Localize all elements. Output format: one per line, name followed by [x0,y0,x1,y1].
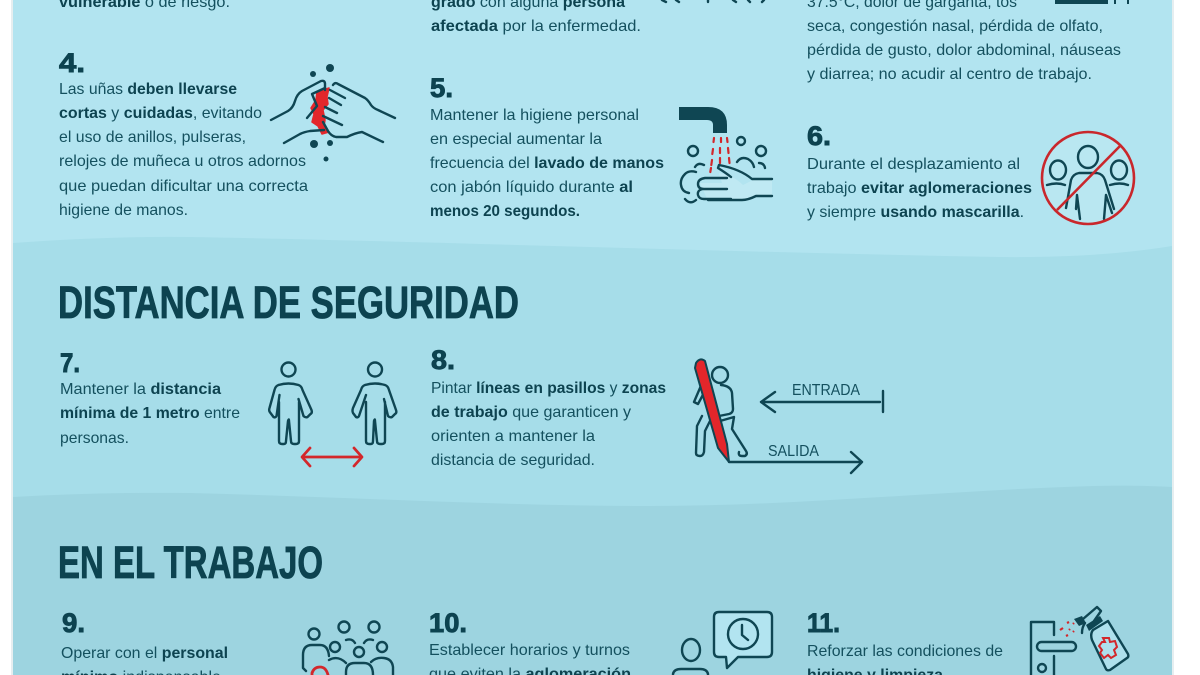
icon: bed [1055,0,1129,4]
measure 8: painted lines: de trabajo que garanticen y [431,404,631,421]
measure 4: nails: cortas y cuidadas, evitando [59,105,262,122]
measure 7: distance: personas. [60,430,129,447]
measure 5: handwashing: en especial aumentar la [430,131,602,148]
panel: higiene [13,0,1172,262]
measure 8: painted lines: distancia de seguridad. [431,452,595,469]
measure 5: handwashing: frecuencia del lavado de manos [430,155,664,172]
icon: faucet and washing hand [679,107,772,202]
icon: disinfectant spray on door handle [1031,607,1128,675]
measure 6: commute: trabajo evitar aglomeraciones [807,180,1032,197]
measure contact text line 2: afectada por la enfermedad. [431,18,641,35]
measure 4: nails: higiene de manos. [59,202,188,219]
measure 4: nails: 4. [59,48,85,78]
measure 9: minimum staff [61,608,228,675]
measure 7: distance: 7. [60,348,80,378]
measure 4: nails: que puedan dificultar una correcta [59,178,308,195]
heading: distancia de seguridad: DISTANCIA DE SEGURIDAD [58,277,519,328]
measure 8: painted lines: Pintar líneas en pasillos y zonas [431,380,666,397]
measure 8: painted lines: 8. [431,345,455,375]
heading: en el trabajo: EN EL TRABAJO [58,537,323,588]
label: entrada: ENTRADA [792,382,860,399]
panel: en el trabajo [13,486,1172,675]
icon: person with clock speech bubble [673,612,772,675]
measure 7: distance: Mantener la distancia [60,381,221,398]
measure 5: handwashing: con jabón líquido durante al [430,179,633,196]
measure 8: painted lines [431,345,666,469]
panel: distancia de seguridad [13,237,1172,515]
measure 4: nails: relojes de muñeca u otros adornos [59,153,306,170]
label: salida: SALIDA [768,443,819,460]
icon: no crowds [1042,132,1134,224]
measure 5: handwashing: 5. [430,73,453,103]
measure 5: handwashing: Mantener la higiene personal [430,107,639,124]
measure 9: minimum staff: Operar con el personal [61,645,228,662]
measure 11: cleaning [807,608,1003,675]
icon: partial top of middle icon [662,0,764,2]
measure 10: shifts: 10. [429,608,467,638]
measure 7: distance [60,348,240,447]
icon: group of people [303,622,393,675]
measure 8: painted lines: orienten a mantener la [431,428,595,445]
symptoms text: y diarrea; no acudir al centro de trabajo. [807,66,1092,83]
symptoms text: seca, congestión nasal, pérdida de olfato, [807,18,1103,35]
icon: person painting entry and exit lines [694,359,883,473]
icon: two people one metre apart [269,362,396,466]
measure 5: handwashing: menos 20 segundos. [430,203,580,220]
measure 4: nails: Las uñas deben llevarse [59,81,237,98]
measure 6: commute: y siempre usando mascarilla. [807,204,1024,221]
measure 4: nails: el uso de anillos, pulseras, [59,129,246,146]
measure 6: commute: Durante el desplazamiento al [807,156,1020,173]
measure 4: nails [59,48,308,219]
measure 10: shifts: Establecer horarios y turnos [429,642,630,659]
symptoms text [807,0,1121,83]
symptoms text: pérdida de gusto, dolor abdominal, náuseas [807,42,1121,59]
measure 7: distance: mínima de 1 metro entre [60,405,240,422]
measure 11: cleaning: Reforzar las condiciones de [807,643,1003,660]
measure 10: shifts [429,608,631,675]
measure 6: commute [807,121,1032,221]
measure 6: commute: 6. [807,121,831,151]
measure 9: minimum staff: 9. [62,608,85,638]
measure 5: handwashing [430,73,664,220]
icon: hands with red nails [271,64,395,162]
measure 11: cleaning: 11. [807,608,840,638]
